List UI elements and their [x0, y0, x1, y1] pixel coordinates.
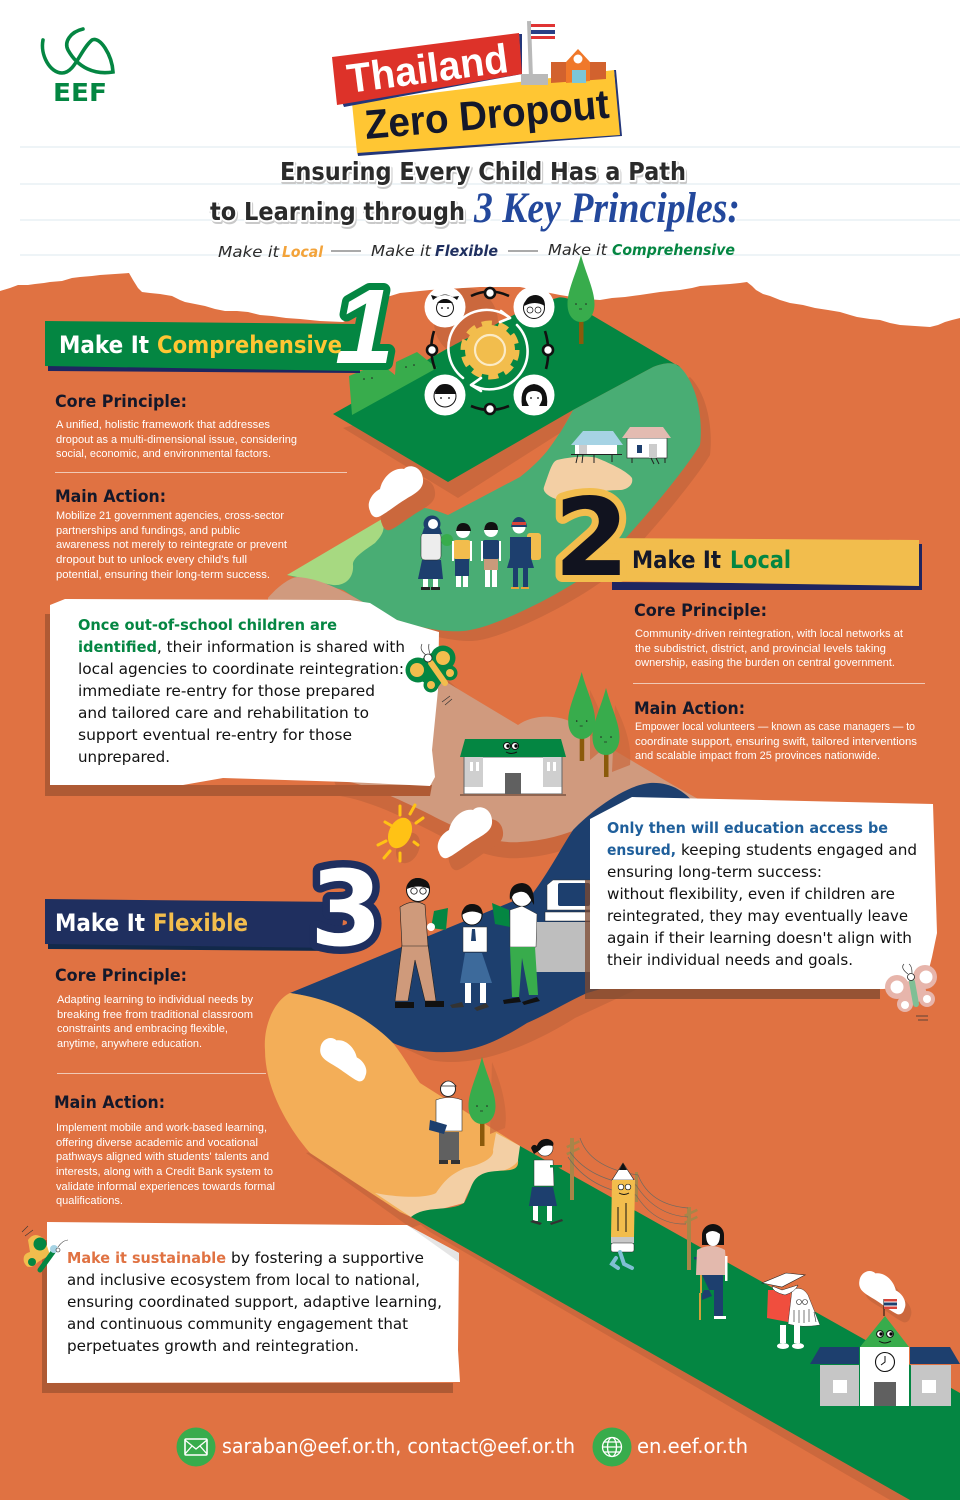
panel: Main Action flexible: Main Action: — [54, 1093, 165, 1113]
person: hijab woman — [418, 516, 453, 590]
icon: flag pole — [521, 21, 555, 85]
logo: EEF — [42, 29, 113, 107]
three principles line: Make it — [548, 241, 608, 259]
contact: website: en.eef.or.th — [637, 1434, 748, 1458]
icon: envelope — [176, 1428, 216, 1466]
panel: Core Principle local — [633, 601, 925, 684]
medium green hill — [287, 363, 701, 631]
icon: boy face — [424, 374, 466, 416]
callout: education access: without flexibility, even if children are — [607, 885, 895, 903]
contact: website — [592, 1428, 748, 1466]
road and hill illustration — [265, 288, 960, 1500]
cloud 3 — [320, 1038, 366, 1081]
panel: Core Principle local: ownership, easing the burden on central government. — [635, 657, 895, 669]
tree by the road — [468, 1057, 506, 1146]
person: girl in yellow — [452, 523, 472, 587]
panel: Main Action local — [634, 699, 918, 762]
character: graduate — [762, 1273, 820, 1349]
callout: out-of-school children: identified — [78, 638, 157, 656]
contact: email — [176, 1428, 575, 1466]
banner: number 2 and Make It Local — [600, 538, 922, 590]
brown tail over light green — [268, 577, 363, 602]
banner: Make It Flexible — [45, 899, 345, 951]
three principles line: Local — [282, 243, 324, 261]
light green patch — [287, 519, 384, 585]
panel: Core Principle flexible: breaking free from traditional classroom — [57, 1009, 253, 1021]
icon: gear — [464, 324, 516, 376]
callout: education access: reintegrated, they may eventually leave — [607, 907, 908, 925]
person: boy in navy — [481, 522, 501, 587]
icon: globe — [592, 1428, 632, 1466]
callout: education access: ensured, — [607, 841, 676, 859]
icon: school — [551, 49, 606, 83]
person: schoolgirl — [450, 904, 492, 1011]
banner: number 2 and Make It Local: Make It — [632, 546, 721, 574]
icon: small school — [460, 739, 566, 796]
panel: Core Principle comprehensive: Core Principle: — [55, 392, 187, 412]
panel: Main Action comprehensive: dropout but to unlock every child's full — [56, 554, 247, 566]
contact: email: saraban@eef.or.th, contact@eef.or.th — [222, 1434, 575, 1458]
subtitle heading: Ensuring Every Child Has a Path — [280, 157, 686, 186]
callout: out-of-school children — [45, 599, 439, 796]
panel: Core Principle comprehensive — [55, 392, 347, 472]
navy ribbon — [290, 783, 700, 1052]
icon: woman face — [514, 374, 554, 416]
panel: Main Action comprehensive: Mobilize 21 government agencies, cross-sector — [56, 510, 284, 522]
icon: girl face — [424, 286, 466, 328]
upper shadow blob — [434, 288, 498, 356]
green road — [411, 1146, 960, 1500]
callout: out-of-school children: support eventual re-entry for those — [78, 726, 352, 744]
three principles line: Comprehensive — [612, 241, 735, 259]
medium green shadow — [407, 377, 711, 641]
subtitle heading — [210, 157, 740, 232]
panel: Core Principle flexible: Adapting learning to individual needs by — [57, 994, 254, 1006]
panel: Core Principle comprehensive: social, economic, and environmental factors. — [56, 448, 271, 460]
icon: sun — [378, 805, 425, 867]
panel: Core Principle flexible: constraints and embracing flexible, — [57, 1023, 228, 1035]
navy ribbon shadow — [393, 960, 700, 1062]
three principles line: Make it — [218, 243, 280, 261]
banner: Make It Flexible: Flexible — [153, 909, 248, 937]
callout: out-of-school children: , their information is shared with — [157, 638, 405, 656]
number 2: 2 — [554, 476, 629, 601]
callout: make it sustainable: perpetuates growth and reintegration. — [67, 1337, 359, 1355]
dark green diamond — [333, 297, 680, 482]
gear cycle — [424, 286, 554, 416]
panel: Main Action flexible — [54, 1093, 275, 1207]
panel: Main Action flexible: interests, along with a Credit Bank system to — [56, 1166, 273, 1178]
callout: out-of-school children: Once out-of-school children are — [78, 616, 337, 634]
cloud 2 — [438, 807, 503, 870]
circular arrows — [448, 310, 528, 391]
icon: pink butterfly — [885, 964, 937, 1020]
hills with faces — [349, 352, 437, 415]
trees pair — [568, 672, 630, 777]
callout: education access: ensuring long-term success: — [607, 863, 822, 881]
callout: make it sustainable: and continuous community engagement that — [67, 1315, 408, 1333]
callout: education access: again if their learning doesn't align with — [607, 929, 912, 947]
logo: EEF: EEF — [53, 78, 107, 107]
panel: Main Action flexible: qualifications. — [56, 1195, 123, 1207]
callout: make it sustainable: ensuring coordinated support, adaptive learning, — [67, 1293, 442, 1311]
person: officer — [395, 878, 448, 1008]
panel: Core Principle flexible: anytime, anywhere education. — [57, 1038, 202, 1050]
panel: Core Principle local: Community-driven reintegration, with local networks at — [635, 628, 903, 640]
banner heading: Make It Comprehensive: Make It — [59, 331, 149, 359]
callout: make it sustainable — [42, 1222, 460, 1393]
diamond shadow — [343, 400, 573, 498]
character: pencil — [611, 1163, 635, 1268]
callout: out-of-school children: local agencies to coordinate reintegration: — [78, 660, 404, 678]
cloud 1 — [369, 466, 435, 530]
callout: out-of-school children: immediate re-entry for those prepared — [78, 682, 375, 700]
tree top — [568, 255, 594, 344]
panel: Main Action local: Empower local volunteers — known as case managers — to — [635, 721, 915, 733]
callout: out-of-school children: and tailored care and rehabilitation to — [78, 704, 369, 722]
people group: community — [418, 516, 541, 590]
callout: out-of-school children: unprepared. — [78, 748, 170, 766]
icon: man face — [514, 286, 554, 328]
panel: Core Principle flexible — [55, 966, 266, 1074]
banner: number 2 and Make It Local: Local — [730, 546, 791, 574]
brown ribbon — [268, 577, 700, 842]
panel: Core Principle local: the subdistrict, district, and provincial levels taking — [635, 643, 886, 655]
red banner — [332, 33, 522, 107]
icon: big school — [810, 1299, 960, 1406]
icon: houses — [544, 427, 671, 500]
panel: Main Action local: coordinate support, ensuring swift, tailored interventions — [635, 736, 918, 748]
callout: make it sustainable: Make it sustainable — [67, 1249, 226, 1267]
brown ribbon shadow — [268, 593, 690, 858]
yellow banner — [352, 70, 622, 156]
panel: Core Principle flexible: Core Principle: — [55, 966, 187, 986]
panel: Make It Comprehensive banner — [45, 321, 360, 373]
title: Zero Dropout: Zero Dropout — [363, 81, 611, 148]
cloud 4 — [859, 1271, 911, 1322]
callout: education access: keeping students engaged and — [681, 841, 917, 859]
title banner — [332, 21, 622, 156]
people group: teacher and students — [395, 878, 540, 1011]
panel: Main Action local: Main Action: — [634, 699, 745, 719]
person: man in white with book — [429, 1081, 462, 1164]
panel: Core Principle comprehensive: dropout as a multi-dimensional issue, considering — [56, 434, 297, 446]
number 1: 1 — [335, 268, 394, 386]
icon: green butterfly — [406, 644, 458, 705]
three principles line: Flexible — [435, 242, 498, 260]
person: student on crutch — [694, 1224, 728, 1320]
peach shadow — [306, 1150, 428, 1228]
utility poles — [566, 1138, 698, 1270]
person: female teacher — [492, 883, 540, 1005]
green road shadow — [411, 1217, 915, 1500]
callout: make it sustainable: by fostering a supportive — [231, 1249, 424, 1267]
light peach strip — [375, 1133, 520, 1217]
panel: Main Action comprehensive: awareness not merely to reintegrate or prevent — [56, 539, 287, 551]
callout: make it sustainable: and inclusive ecosystem from local to national, — [67, 1271, 420, 1289]
callout: education access: Only then will education access be — [607, 819, 888, 837]
banner: Make It Flexible: Make It — [55, 909, 145, 937]
panel: Core Principle comprehensive: A unified, holistic framework that addresses — [56, 419, 271, 431]
subtitle heading: 3 Key Principles: — [473, 185, 740, 232]
callout: education access: their individual needs and goals. — [607, 951, 853, 969]
panel: Core Principle local: Core Principle: — [634, 601, 767, 621]
panel: Main Action flexible: Implement mobile and work-based learning, — [56, 1122, 267, 1134]
three principles line — [218, 241, 735, 261]
panel: Main Action flexible: offering diverse academic and vocational — [56, 1137, 258, 1149]
person: hill tribe woman — [507, 517, 541, 589]
subtitle heading: to Learning through — [210, 197, 465, 226]
panel: Main Action local: and scalable impact from 25 provinces nationwide. — [635, 750, 880, 762]
peach hill — [265, 993, 520, 1217]
panel: Main Action comprehensive — [55, 487, 287, 581]
panel: Main Action flexible: validate informal experiences towards formal — [56, 1181, 275, 1193]
panel: Main Action comprehensive: partnerships and fundings, and public — [56, 525, 241, 537]
panel: Main Action comprehensive: Main Action: — [55, 487, 166, 507]
connectors — [427, 288, 553, 414]
icon: yellow butterfly — [22, 1226, 68, 1270]
callout: education access — [585, 797, 937, 999]
banner heading: Make It Comprehensive: Comprehensive — [157, 331, 342, 359]
title: Thailand: Thailand — [344, 35, 511, 102]
number 3: 3 — [310, 848, 382, 970]
person: schoolgirl with book — [529, 1139, 563, 1225]
banner heading: Make It Comprehensive — [59, 331, 342, 359]
three principles line: Make it — [371, 242, 432, 260]
panel: Main Action flexible: pathways aligned with students' talents and — [56, 1151, 269, 1163]
icon: computer desk — [535, 880, 595, 972]
panel: Main Action comprehensive: potential, ensuring their long-term success. — [56, 569, 270, 581]
